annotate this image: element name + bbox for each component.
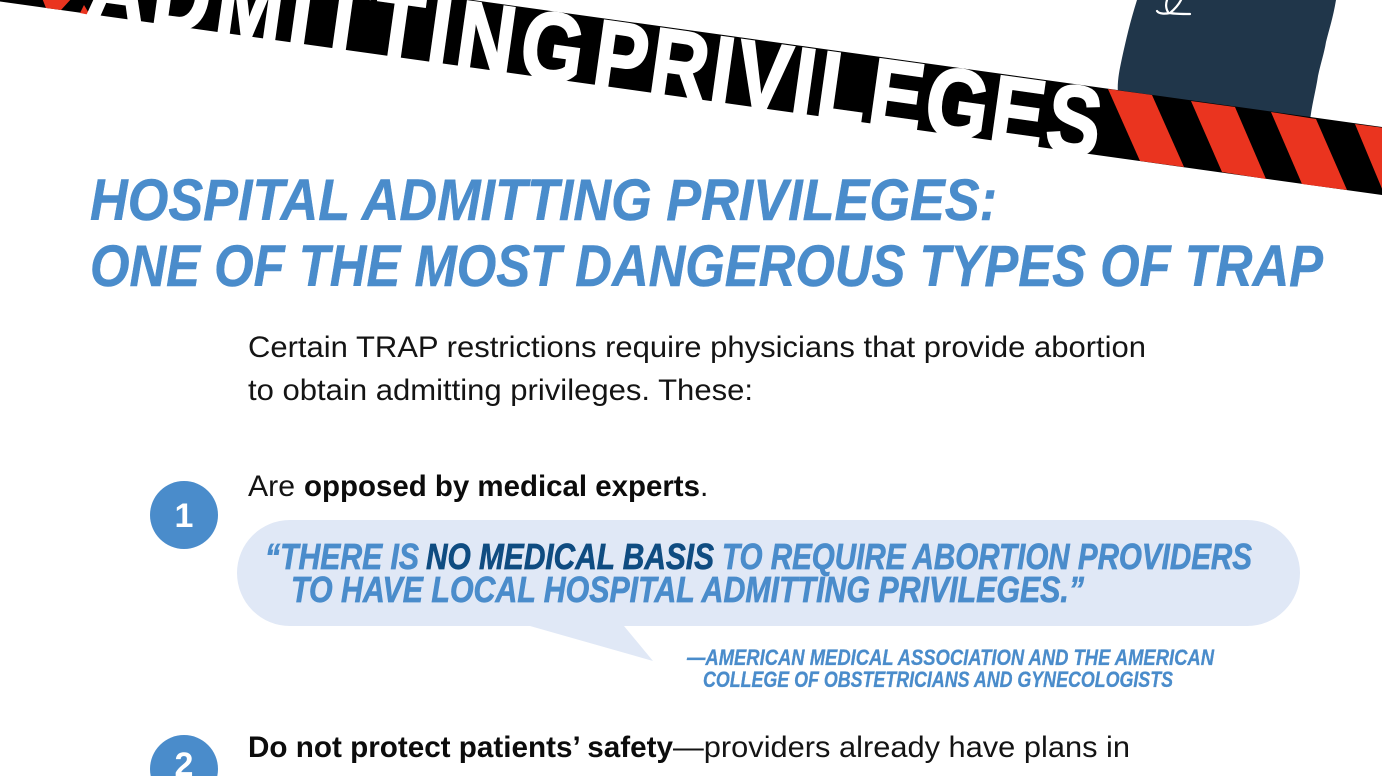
quote attribution: —AMERICAN MEDICAL ASSOCIATION AND THE AMERICAN (686, 645, 1215, 670)
quote text: “THERE IS (265, 536, 419, 577)
point 1 text: Are (248, 470, 295, 503)
icon: figure in navy clothing behind the tape (1118, 0, 1336, 122)
quote attribution: COLLEGE OF OBSTETRICIANS AND GYNECOLOGISTS (703, 667, 1173, 692)
quote text: TO HAVE LOCAL HOSPITAL ADMITTING PRIVILEGES.” (291, 569, 1084, 610)
quote text: NO MEDICAL BASIS (426, 536, 714, 577)
quote text (265, 536, 1252, 610)
tape red stripes (42, 0, 1382, 202)
number badge 2 (150, 735, 218, 776)
intro text: Certain TRAP restrictions require physicians that provide abortion (248, 331, 1146, 364)
quote text: TO REQUIRE ABORTION PROVIDERS (722, 536, 1252, 577)
quote attribution (686, 645, 1215, 692)
intro text: to obtain admitting privileges. These: (248, 374, 753, 407)
heading: HOSPITAL ADMITTING PRIVILEGES: (90, 168, 997, 233)
point 2 text (248, 731, 1130, 764)
point 2 text: —providers already have plans in (673, 731, 1130, 764)
tape title text (82, 0, 1112, 179)
intro text (248, 331, 1146, 407)
number badge 1: 1 (175, 497, 193, 535)
point 2 text: Do not protect patients’ safety (248, 731, 673, 764)
speech bubble (237, 520, 1300, 661)
heading (90, 168, 1323, 299)
number badge 1 (150, 481, 218, 549)
point 1 text: . (700, 470, 708, 503)
caution tape banner: admitting privileges (0, 0, 1382, 202)
tape title text: PRIVILEGES (587, 0, 1112, 179)
point 1 text: opposed by medical experts (304, 470, 700, 503)
